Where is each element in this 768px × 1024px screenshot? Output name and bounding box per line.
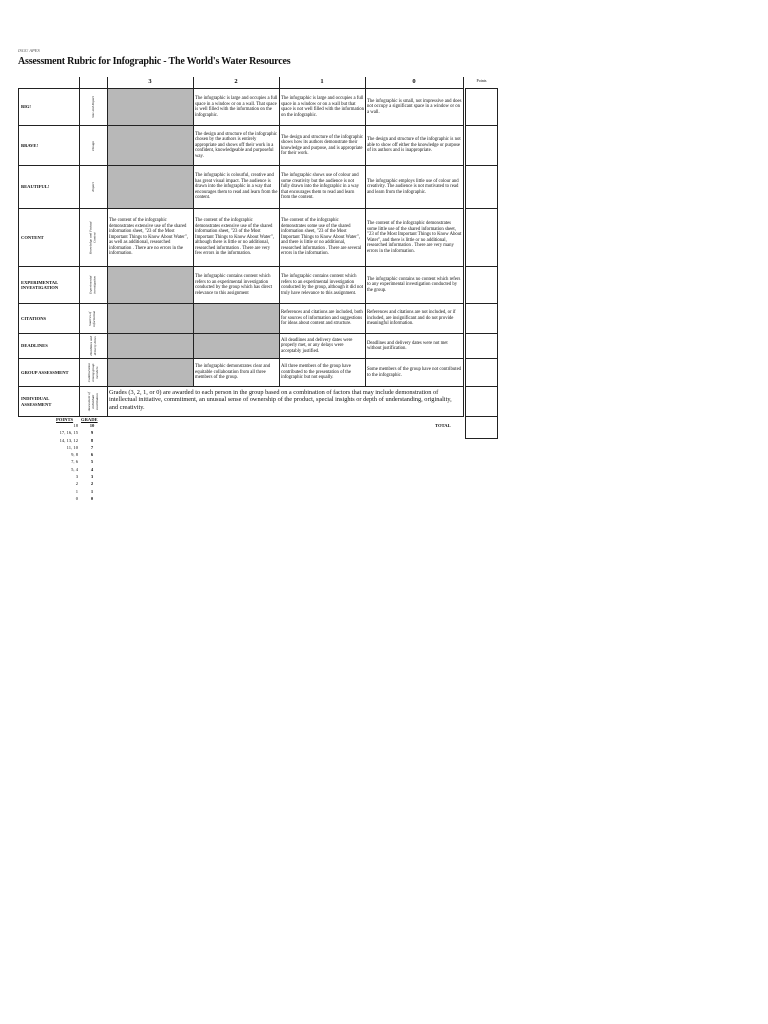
row: BEAUTIFUL <box>18 165 80 209</box>
rubric table: Impact <box>91 182 95 192</box>
grade conversion table: 0 <box>76 496 78 501</box>
column headers: 3 <box>148 78 152 85</box>
rubric table: investigation <box>92 276 96 294</box>
grade conversion table: 3 <box>76 474 78 479</box>
title: Assessment Rubric for Infographic - The World's Water Resources <box>18 56 290 67</box>
row: CITATIONS <box>18 303 80 334</box>
grade conversion table: 11, 10 <box>67 445 78 450</box>
row: EXPERIMENTAL INVESTIGATION <box>18 266 80 304</box>
rubric table: The infographic is small, not impressive and does not occupy a significant space in a window or on a wall. <box>367 99 461 115</box>
rubric table: All deadlines and delivery dates were properly met, or any delays were acceptably justified. <box>281 338 352 354</box>
rubric table: The infographic contains content which refers to an experimental investigation conducted by the group, although it did not truly have relevance to this assignment. <box>281 274 363 296</box>
grade conversion table: 7 <box>91 445 93 450</box>
rubric table: Size and Impact <box>91 96 95 118</box>
rubric table: The infographic contains content which refers to an experimental investigation conducted by the group which has direct relevance to this assignment <box>195 274 272 296</box>
rubric table: Knowledge and Factual <box>89 221 93 254</box>
row: INDIVIDUAL ASSESSMENT: INDIVIDUAL ASSESSMENT <box>21 396 51 406</box>
rubric table: Content <box>92 232 96 243</box>
grade conversion table: 3 <box>91 474 93 479</box>
row: BRAVE: BRAVE! <box>21 143 38 148</box>
grade conversion table: 5 <box>91 459 93 464</box>
column headers: 0 <box>412 78 416 85</box>
grade conversion table: 6 <box>91 452 93 457</box>
row: CONTENT: CONTENT <box>21 235 44 240</box>
grade conversion table: 4 <box>91 467 93 472</box>
rubric table: among group <box>91 363 95 382</box>
rubric table: contribution <box>94 393 98 410</box>
rubric table: The content of the infographic demonstrates extensive use of the shared information sheet, "23 of the Most Important Things to Know About Water", although there is little or no additional, researched information . There are very few errors in the information. <box>195 218 274 256</box>
grade conversion table: 0 <box>91 496 93 501</box>
rubric table: The infographic employs little use of colour and creativity. The audience is not motivated to read and learn from the infographic. <box>367 179 459 195</box>
grade conversion table: 2 <box>91 481 93 486</box>
row: BIG: BIG! <box>21 104 31 109</box>
row: BEAUTIFUL: BEAUTIFUL! <box>21 184 49 189</box>
grade conversion table: 5, 4 <box>71 467 78 472</box>
rubric table: The design and structure of the infographic shows how its authors demonstrate their knowledge and purpose, and is appropriate for their work. <box>281 134 363 156</box>
rubric table: Deadlines and <box>89 336 93 356</box>
rubric table: The infographic is large and occupies a full space in a window or on a wall. That space is well filled with the information on the infographic. <box>195 96 277 118</box>
rubric table: The content of the infographic demonstrates some use of the shared information sheet, "23 of the Most Important Things to Know About Water", and there is little or no additional, researched information . There are several errors in the information. <box>281 218 361 256</box>
rubric table: The content of the infographic demonstrates some little use of the shared information sheet, "23 of the Most Important Things to Know About Water", and there is little or no additional, researched information . There are very many errors in the information. <box>367 221 461 254</box>
rubric table: individual <box>91 395 95 408</box>
grade conversion table: POINTS <box>56 417 73 422</box>
grade conversion table: 14, 13, 12 <box>60 438 78 443</box>
column headers <box>79 77 486 88</box>
rubric table: information <box>92 310 96 327</box>
row: GROUP ASSESSMENT <box>18 358 80 387</box>
grade conversion table: 1 <box>91 489 93 494</box>
rubric table: The infographic is large and occupies a full space in a window or on a wall but that space is not well filled with the information on the infographic. <box>281 96 364 118</box>
grade conversion table: 18 <box>73 423 78 428</box>
grade conversion table <box>56 417 98 501</box>
rubric table: Collaboration <box>87 363 91 382</box>
rubric table: The design and structure of the infographic is not able to show off either the knowledge or purpose of its authors and is inappropriate. <box>367 137 461 153</box>
rubric table: Assessment of <box>87 392 91 411</box>
grade conversion table: 10 <box>90 423 94 428</box>
grade conversion table: 2 <box>76 481 78 486</box>
rubric table: Sources of <box>89 311 93 326</box>
rubric table <box>18 88 464 417</box>
rubric table: Deadlines and delivery dates were not met without justification. <box>367 340 448 351</box>
grade conversion table: 1 <box>76 489 78 494</box>
rubric table: Some members of the group have not contributed to the infographic. <box>367 367 461 378</box>
rubric table: References and citations are included, both for sources of information and suggestions for ideas about content and structure. <box>281 310 363 326</box>
grade conversion table: 8 <box>91 438 93 443</box>
total label: TOTAL <box>435 423 451 428</box>
row: DEADLINES <box>18 333 80 359</box>
row: INDIVIDUAL ASSESSMENT <box>18 386 80 417</box>
rubric table: members <box>94 366 98 379</box>
grade conversion table: 7, 6 <box>71 459 78 464</box>
rubric table: The design and structure of the infographic chosen by the authors is entirely appropriate and shows off their work in a confident, knowledgeable and purposeful way. <box>195 132 277 159</box>
row: GROUP ASSESSMENT: GROUP ASSESSMENT <box>21 370 69 375</box>
column headers: 1 <box>320 78 324 85</box>
rubric table: delivery dates <box>92 337 96 355</box>
rubric table: The infographic is colourful, creative and has great visual impact. The audience is drawn into the infographic in a way that encourages them to read and learn from the content. <box>195 173 277 200</box>
row: EXPERIMENTAL INVESTIGATION: EXPERIMENTAL INVESTIGATION <box>21 280 58 290</box>
row: CONTENT <box>18 208 80 267</box>
rubric table: All three members of the group have contributed to the presentation of the infographic but not equally. <box>281 364 351 380</box>
rubric table: The content of the infographic demonstrates extensive use of the shared information sheet, "23 of the Most Important Things to Know About Water", as well as additional, researched information . There are no errors in the information. <box>109 218 188 256</box>
row: BIG <box>18 88 80 126</box>
rubric table: The infographic demonstrates clear and equitable collaboration from all three members of the group. <box>195 364 270 380</box>
rubric table: The infographic contains no content which refers to any experimental investigation conducted by the group. <box>367 277 460 293</box>
column headers: 2 <box>234 78 238 85</box>
grade conversion table: GRADE <box>81 417 98 422</box>
rubric table: Grades (3, 2, 1, or 0) are awarded to each person in the group based on a combination of factors that may include demonstration of intellectual initiative, commitment, an unusual sense of ownership of the product, special insights or depth of understanding, originality, and creativity. <box>109 389 452 411</box>
grade conversion table: 17, 16, 15 <box>60 430 78 435</box>
rubric table: The infographic shows use of colour and some creativity but the audience is not fully drawn into the infographic in a way that encourages them to read and learn from the content. <box>281 173 359 200</box>
grade conversion table: 9, 8 <box>71 452 78 457</box>
grade conversion table: 9 <box>91 430 93 435</box>
row: DEADLINES: DEADLINES <box>21 343 48 348</box>
rubric table: References and citations are not included, or if included, are insignificant and do not provide meaningful information. <box>367 310 456 326</box>
header tag: ISGU APES <box>18 48 40 53</box>
rubric table: Experimental <box>89 276 93 294</box>
row: CITATIONS: CITATIONS <box>21 316 46 321</box>
rubric table: Design <box>91 141 95 150</box>
points column <box>465 88 498 439</box>
column headers: Points <box>476 78 486 83</box>
row: BRAVE <box>18 125 80 166</box>
